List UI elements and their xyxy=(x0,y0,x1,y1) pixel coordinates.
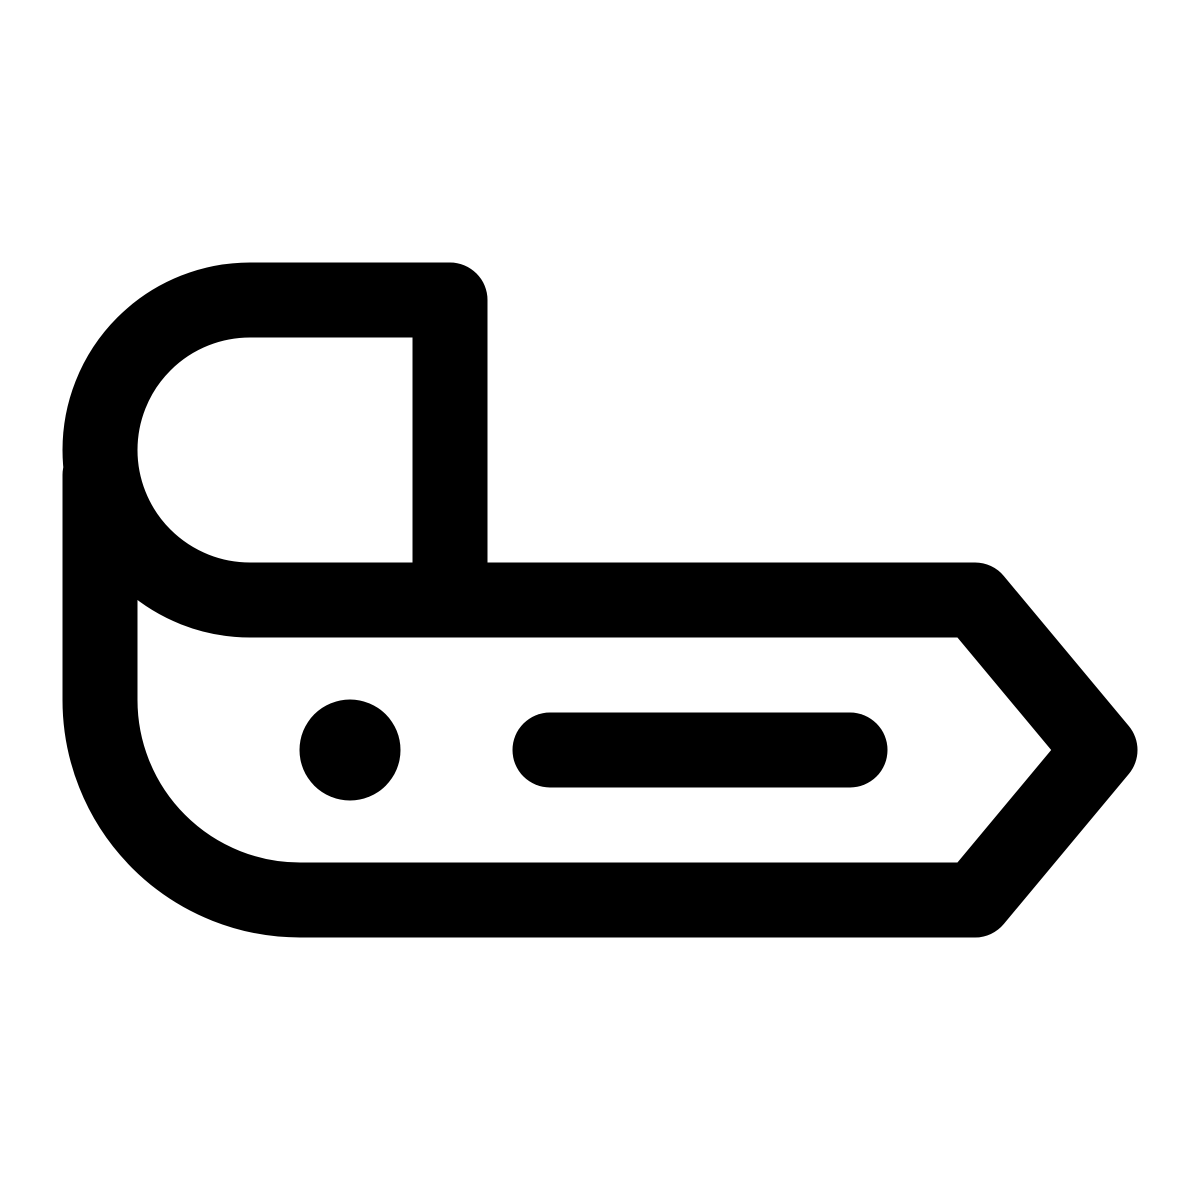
icon outline: flap and arrow body xyxy=(100,300,1100,900)
icon: dot xyxy=(300,700,400,800)
icon: dash line xyxy=(550,712,850,788)
